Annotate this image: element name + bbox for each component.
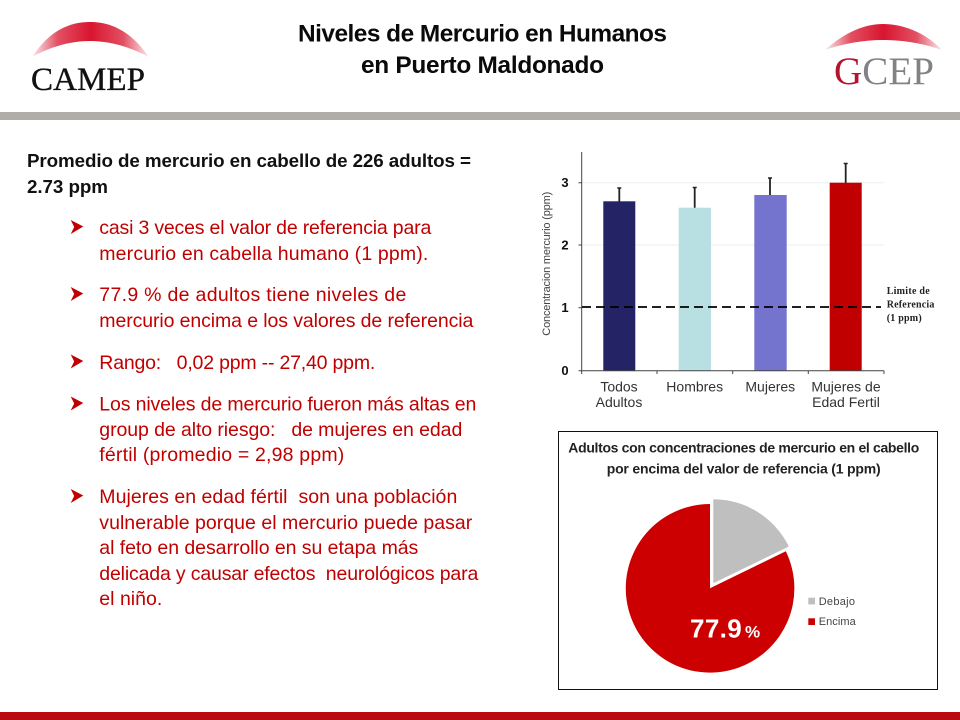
heading: average mercury in hair: 2.73 ppm (27, 176, 108, 197)
bullet: high risk group: fértil (promedio = 2,98 ppm) (99, 444, 344, 466)
bullet: vulnerable population: Mujeres en edad fértil son una población (99, 486, 457, 508)
bar: Mujeres de Edad Fertil (830, 164, 862, 371)
heading: average mercury in hair: Promedio de mercurio en cabello de 226 adultos = (27, 150, 471, 171)
title: Niveles de Mercurio en Humanos (298, 20, 667, 48)
bullet: vulnerable population (71, 486, 478, 610)
legend (808, 596, 857, 628)
legend: Debajo (819, 596, 855, 608)
bullet: three times reference value: mercurio en cabella humano (1 ppm). (99, 243, 428, 265)
bar chart: mercury concentration (541, 152, 934, 410)
axes (578, 152, 884, 374)
pie value label: % (745, 622, 760, 641)
text block: key findings (27, 150, 478, 610)
y axis numbers: 1 (561, 300, 569, 315)
bar: Todos Adultos (603, 188, 635, 371)
title (298, 20, 667, 79)
bullet: vulnerable population: vulnerable porque el mercurio puede pasar (99, 512, 473, 534)
x axis labels: Mujeres (745, 379, 795, 395)
title: en Puerto Maldonado (361, 52, 604, 79)
legend: Encima (819, 616, 857, 628)
bullet: range: Rango: 0,02 ppm -- 27,40 ppm. (99, 352, 375, 374)
pie slice: Encima (626, 504, 794, 673)
x axis labels: Hombres (666, 379, 723, 395)
x axis labels (596, 379, 881, 410)
bullet: share of adults above reference: 77.9 % de adultos tiene niveles de (99, 284, 406, 306)
bullet: share of adults above reference: mercurio encima e los valores de referencia (99, 310, 473, 332)
pie slice: Debajo (713, 499, 789, 583)
bullet: high risk group (71, 394, 476, 466)
y axis numbers: 3 (561, 175, 569, 190)
bullet: three times reference value: casi 3 veces el valor de referencia para (99, 217, 431, 239)
y axis numbers (561, 175, 569, 378)
panel: pie chart (558, 432, 938, 690)
pie chart heading (568, 439, 919, 476)
reference limit label: Referencia (887, 300, 934, 311)
pie chart heading: por encima del valor de referencia (1 ppm) (607, 460, 881, 476)
reference limit label (887, 286, 934, 324)
logo: CAMEP (31, 22, 149, 98)
y axis title: Concentracion mercurio (ppm) (541, 192, 553, 336)
x axis labels: Edad Fertil (812, 394, 880, 410)
bullet: vulnerable population: delicada y causar efectos neurológicos para (99, 563, 478, 585)
logo: GCEP: GCEP (834, 50, 934, 93)
bullet: three times reference value (71, 217, 431, 265)
logo: GCEP (825, 24, 942, 93)
logo: CAMEP: CAMEP (31, 62, 145, 98)
y axis numbers: 2 (561, 238, 569, 252)
reference limit label: Limite de (887, 286, 930, 297)
pie value label: 77.9 (690, 613, 742, 643)
bullet: vulnerable population: al feto en desarrollo en su etapa más (99, 537, 419, 559)
reference line (582, 306, 881, 308)
footer band (0, 712, 960, 720)
header divider band (0, 112, 960, 120)
y axis numbers: 0 (561, 363, 569, 378)
x axis labels: Mujeres de (811, 379, 881, 395)
bar: Mujeres (754, 178, 787, 371)
bullet: vulnerable population: el niño. (99, 588, 162, 610)
reference limit label: (1 ppm) (887, 313, 922, 324)
pie chart heading: Adultos con concentraciones de mercurio en el cabello (568, 439, 919, 455)
bullet: high risk group: Los niveles de mercurio fueron más altas en (99, 394, 476, 416)
bullet: share of adults above reference (71, 284, 473, 332)
x axis labels: Todos (600, 379, 638, 395)
bullet: high risk group: group de alto riesgo: de mujeres en edad (99, 419, 462, 441)
x axis labels: Adultos (596, 394, 642, 410)
bar: Hombres (679, 188, 711, 371)
heading: average mercury in hair (27, 150, 471, 197)
